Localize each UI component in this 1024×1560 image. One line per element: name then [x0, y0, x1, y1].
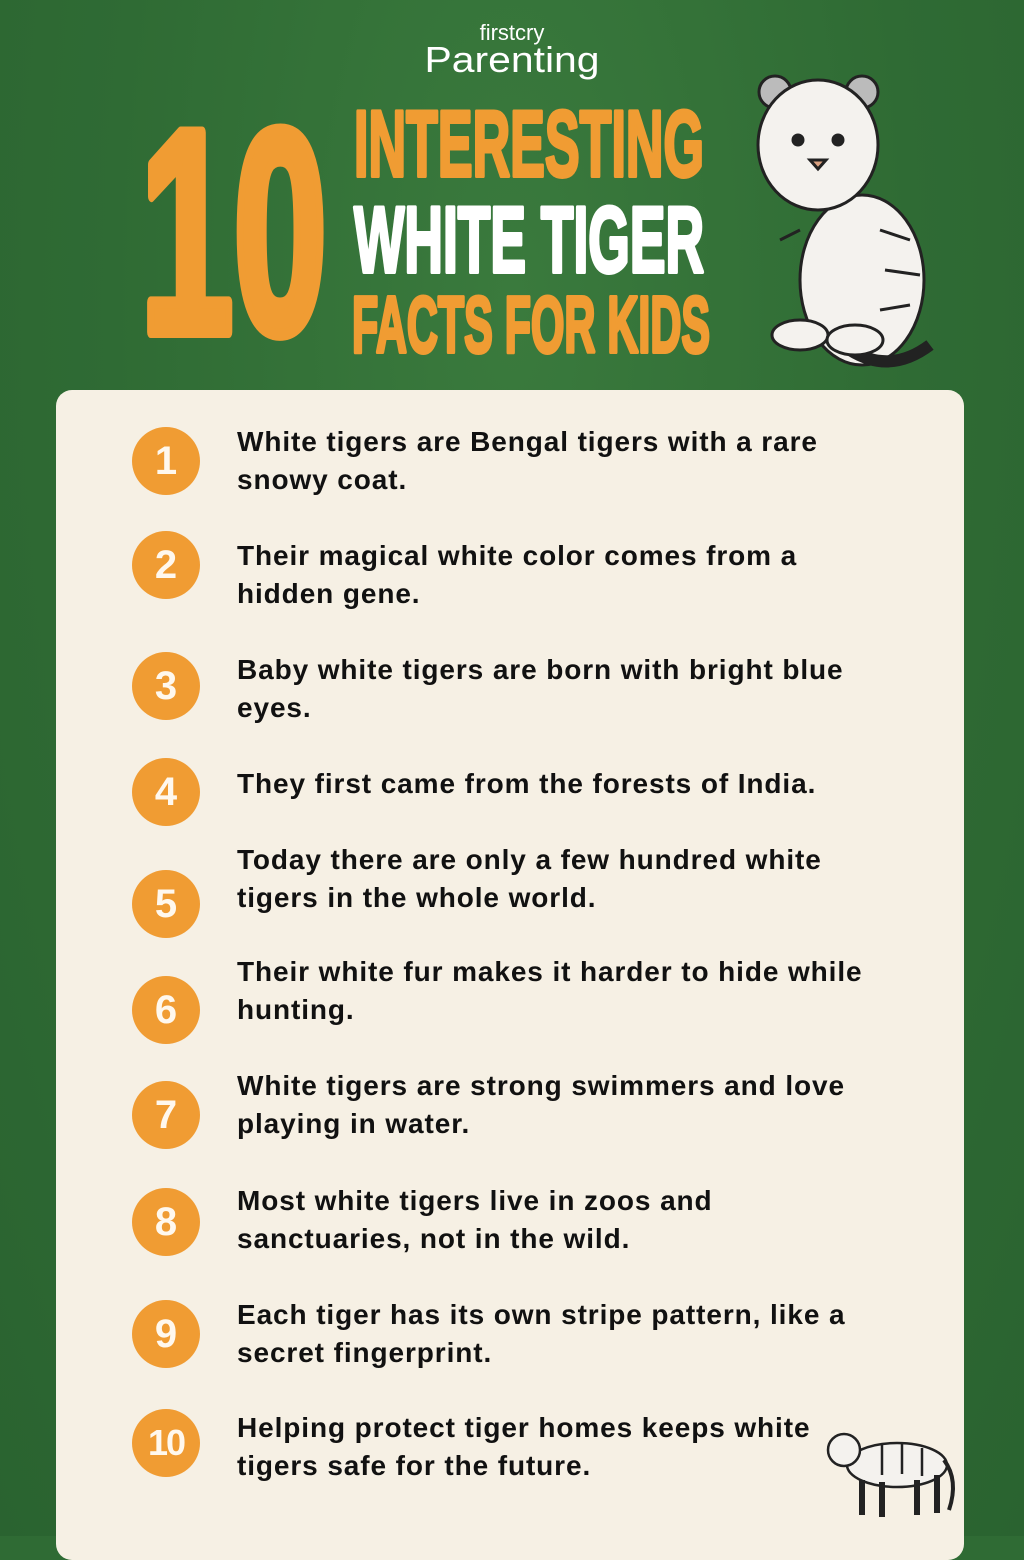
panel: facts list: 4 [155, 770, 177, 814]
panel: facts list: 2 [155, 543, 177, 587]
icon: sitting tiger [758, 76, 930, 365]
panel: facts list: Their magical white color comes from a [237, 540, 797, 571]
logo: Parenting [424, 39, 600, 80]
panel: facts list: White tigers are Bengal tigers with a rare [237, 426, 818, 457]
panel: facts list [56, 390, 964, 1560]
fact 9 [132, 1299, 845, 1368]
panel: facts list: secret fingerprint. [237, 1337, 492, 1368]
panel: facts list: 8 [155, 1200, 177, 1244]
title: WHITE TIGER [354, 187, 704, 292]
fact 8 [132, 1185, 713, 1256]
panel: facts list: 1 [155, 439, 177, 483]
logo [424, 20, 600, 80]
panel: facts list: Today there are only a few hundred white [237, 844, 822, 875]
fact 4 [132, 758, 816, 826]
fact 3 [132, 652, 844, 723]
panel: facts list: Baby white tigers are born with bright blue [237, 654, 844, 685]
big number 10: 10 [140, 70, 327, 390]
panel: facts list: snowy coat. [237, 464, 407, 495]
panel: facts list: 5 [155, 882, 177, 926]
panel: facts list: playing in water. [237, 1108, 470, 1139]
logo: firstcry [480, 20, 544, 45]
panel: facts list: hidden gene. [237, 578, 420, 609]
fact 6 [132, 956, 863, 1044]
panel: facts list: 10 [148, 1422, 184, 1463]
panel: facts list: Most white tigers live in zoos and [237, 1185, 713, 1216]
panel: facts list: tigers safe for the future. [237, 1450, 591, 1481]
fact 10 [132, 1409, 810, 1481]
title: INTERESTING [354, 91, 704, 196]
panel: facts list: eyes. [237, 692, 312, 723]
panel: facts list: Helping protect tiger homes keeps white [237, 1412, 810, 1443]
fact 1 [132, 426, 818, 495]
fact 7 [132, 1070, 845, 1149]
header [140, 20, 934, 390]
panel: facts list: hunting. [237, 994, 355, 1025]
panel: facts list: sanctuaries, not in the wild. [237, 1223, 630, 1254]
panel: facts list: 6 [155, 988, 177, 1032]
fact 5 [132, 844, 822, 938]
icon: walking tiger [826, 1432, 955, 1517]
panel: facts list: Each tiger has its own stripe pattern, like a [237, 1299, 845, 1330]
panel: facts list: 7 [155, 1093, 177, 1137]
panel: facts list: tigers in the whole world. [237, 882, 596, 913]
title: FACTS FOR KIDS [352, 280, 710, 369]
fact 2 [132, 531, 797, 609]
panel: facts list: They first came from the forests of India. [237, 768, 816, 799]
panel: facts list: 3 [155, 664, 177, 708]
panel: facts list: Their white fur makes it harder to hide while [237, 956, 863, 987]
panel: facts list: White tigers are strong swimmers and love [237, 1070, 845, 1101]
title [352, 91, 710, 369]
panel: facts list: 9 [155, 1312, 177, 1356]
